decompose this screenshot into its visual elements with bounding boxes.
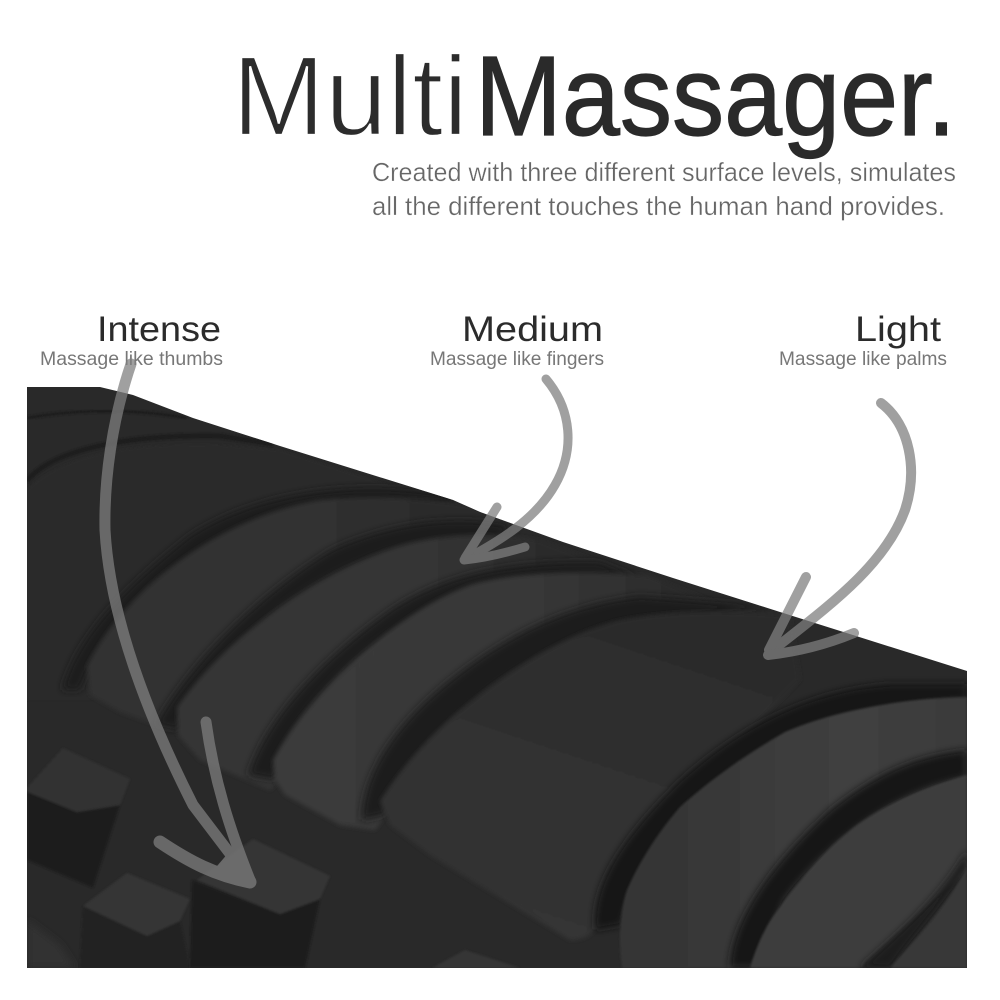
groove D bbox=[248, 562, 640, 780]
block 2 bbox=[80, 873, 190, 968]
subtitle bbox=[372, 157, 956, 221]
groove C bbox=[155, 521, 510, 730]
ridge 2 bbox=[87, 498, 520, 730]
ridge 7 bbox=[750, 775, 967, 968]
block 1 bbox=[27, 748, 130, 888]
label: medium: Medium bbox=[462, 310, 603, 349]
groove E bbox=[362, 596, 770, 820]
upper ridges and thin grooves bbox=[27, 410, 274, 482]
title bbox=[232, 33, 956, 159]
groove G bbox=[730, 750, 967, 968]
block 3 bbox=[190, 839, 330, 968]
groove H bbox=[860, 850, 967, 968]
groove B bbox=[62, 488, 455, 690]
arrow: intense bbox=[105, 364, 252, 882]
label: intense: Massage like thumbs bbox=[40, 348, 223, 370]
ridge 5 bbox=[380, 612, 800, 940]
ridge 4 bbox=[272, 572, 639, 830]
label: intense: Intense bbox=[97, 310, 221, 349]
subtitle: all the different touches the human hand provides. bbox=[372, 191, 945, 221]
label: medium: Massage like fingers bbox=[430, 348, 604, 370]
knob blocks bbox=[27, 748, 520, 968]
title: Multi bbox=[232, 33, 468, 159]
arrow: light bbox=[768, 403, 911, 655]
arrow: medium bbox=[464, 379, 568, 560]
ridge 8 bbox=[890, 867, 967, 968]
ridge 6 bbox=[620, 697, 967, 968]
groove F bbox=[595, 684, 967, 930]
label: light: Massage like palms bbox=[779, 348, 947, 370]
label: intense bbox=[40, 310, 223, 370]
ridge 3 bbox=[176, 535, 496, 788]
subtitle: Created with three different surface levels, simulates bbox=[372, 157, 956, 187]
label: light bbox=[779, 310, 947, 370]
label: medium bbox=[430, 310, 604, 370]
label: light: Light bbox=[855, 310, 941, 349]
title: Massager. bbox=[475, 33, 956, 159]
block 4 bbox=[436, 950, 514, 968]
foam roller photo bbox=[27, 380, 967, 970]
